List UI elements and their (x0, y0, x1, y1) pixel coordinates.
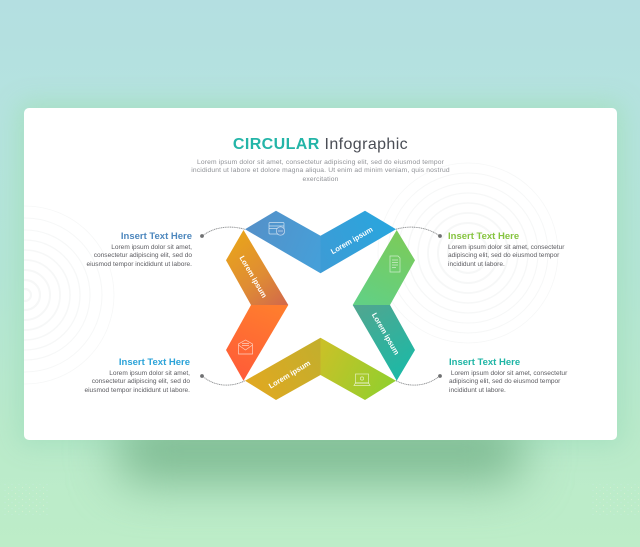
connector: bottom left (200, 374, 245, 385)
white slide card (24, 108, 617, 440)
dot pattern: bottom right (592, 482, 639, 515)
text block: bottom left: consectetur adipiscing elit, sed do (92, 378, 190, 385)
title: CIRCULAR Infographic (233, 136, 408, 153)
dot pattern: bottom left (2, 482, 49, 515)
text block: top right (448, 231, 564, 268)
text block: bottom right: incididunt ut labore. (449, 387, 506, 394)
text block: top left: Insert Text Here (121, 231, 192, 242)
subtitle: Lorem ipsum dolor sit amet, consectetur adipiscing elit, sed do eiusmod tempor (197, 159, 444, 166)
text block: top left: consectetur adipiscing elit, sed do (94, 252, 192, 259)
icon: card and badge (269, 222, 285, 235)
text block: top left (86, 231, 192, 268)
subtitle: incididunt ut labore et dolore magna aliqua. Ut enim ad minim veniam, quis nostrud (191, 167, 450, 174)
text block: top left: Lorem ipsum dolor sit amet, (111, 244, 192, 250)
label: left arm: Lorem ipsum (237, 254, 269, 300)
text block: bottom right: Lorem ipsum dolor sit amet, consectetur (451, 370, 567, 376)
connector: top left (200, 227, 245, 238)
card glow (24, 108, 617, 440)
connector: bottom right (396, 374, 442, 385)
label: right arm: Lorem ipsum (370, 311, 401, 357)
text block: top right: adipiscing elit, sed do eiusmod tempor (448, 252, 559, 259)
text block: top right: Lorem ipsum dolor sit amet, consectetur (448, 244, 564, 250)
subtitle: exercitation (302, 176, 339, 183)
text block: top right: incididunt ut labore. (448, 261, 505, 268)
top blue arm (245, 211, 396, 273)
connector: top right (396, 227, 442, 238)
text block: bottom left (84, 357, 190, 394)
icon: envelope (238, 340, 252, 354)
concentric rings: right (378, 163, 558, 343)
bottom yellow-green arm (245, 338, 396, 400)
right green-teal arm (353, 230, 415, 381)
text block: bottom left: Insert Text Here (119, 357, 190, 368)
concentric rings: left (24, 206, 114, 384)
text block: top right: Insert Text Here (448, 231, 519, 242)
left orange arm (226, 230, 288, 381)
text block: bottom right: adipiscing elit, sed do eiusmod tempor (449, 378, 560, 385)
icon: document (390, 256, 400, 272)
card shadow (118, 420, 522, 482)
label: top arm: Lorem ipsum (329, 225, 375, 256)
icon: laptop (354, 374, 370, 386)
subtitle (191, 159, 450, 183)
text block: top left: eiusmod tempor incididunt ut labore. (86, 261, 192, 268)
label: bottom arm: Lorem ipsum (267, 358, 312, 390)
text block: bottom right (449, 357, 568, 394)
text block: bottom left: eiusmod tempor incididunt ut labore. (84, 387, 190, 394)
text block: bottom left: Lorem ipsum dolor sit amet, (109, 370, 190, 376)
text block: bottom right: Insert Text Here (449, 357, 520, 368)
infographic artwork (4, 163, 639, 515)
